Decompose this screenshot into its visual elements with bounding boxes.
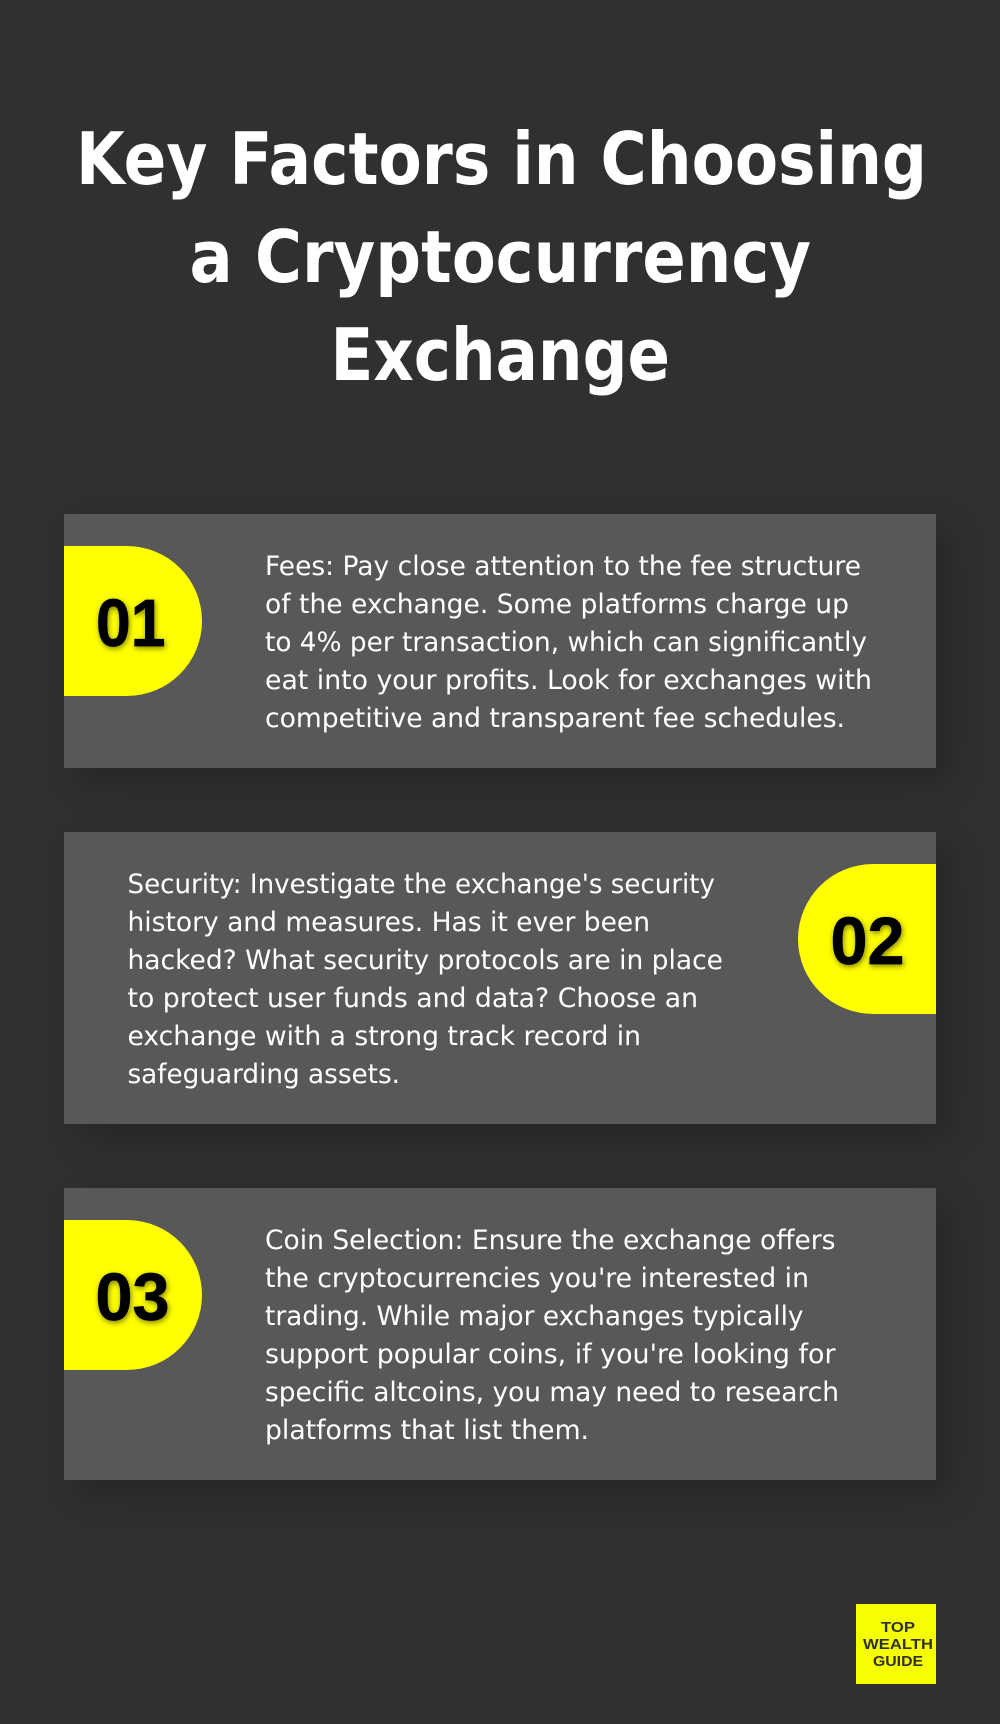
text: coin selection: Coin Selection: Ensure the exchange offers bbox=[265, 1225, 836, 1256]
panel: fees bbox=[64, 514, 936, 768]
title bbox=[76, 117, 927, 397]
text: coin selection: platforms that list them. bbox=[265, 1415, 589, 1446]
text: coin selection: support popular coins, if you're looking for bbox=[265, 1339, 836, 1370]
text: fees bbox=[265, 551, 872, 734]
text: security: exchange with a strong track record in bbox=[128, 1021, 641, 1052]
number badge 01 bbox=[64, 546, 202, 696]
text: security: to protect user funds and data? Choose an bbox=[128, 983, 698, 1014]
title: a Cryptocurrency bbox=[190, 215, 811, 299]
text: security: history and measures. Has it ever been bbox=[128, 907, 650, 938]
text: coin selection: the cryptocurrencies you're interested in bbox=[265, 1263, 809, 1294]
text: security: hacked? What security protocols are in place bbox=[128, 945, 723, 976]
number badge 02 bbox=[798, 864, 936, 1014]
text: security: Security: Investigate the exchange's security bbox=[128, 869, 715, 900]
panel: coin selection bbox=[64, 1188, 936, 1480]
text: fees: competitive and transparent fee schedules. bbox=[265, 703, 845, 734]
text: fees: Fees: Pay close attention to the fee structure bbox=[265, 551, 861, 582]
logo bbox=[856, 1604, 936, 1684]
text: fees: eat into your profits. Look for exchanges with bbox=[265, 665, 872, 696]
text: coin selection bbox=[265, 1225, 839, 1446]
logo: WEALTH bbox=[863, 1637, 933, 1653]
logo: GUIDE bbox=[873, 1654, 923, 1670]
text: coin selection: trading. While major exchanges typically bbox=[265, 1301, 804, 1332]
panel: security bbox=[64, 832, 936, 1124]
logo: TOP bbox=[881, 1620, 915, 1636]
number badge 02: 02 bbox=[830, 904, 904, 979]
text: fees: to 4% per transaction, which can significantly bbox=[265, 627, 867, 658]
number badge 01: 01 bbox=[96, 586, 166, 661]
text: security: safeguarding assets. bbox=[128, 1059, 400, 1090]
number badge 03 bbox=[64, 1220, 202, 1370]
text: coin selection: specific altcoins, you may need to research bbox=[265, 1377, 839, 1408]
number badge 03: 03 bbox=[96, 1260, 170, 1335]
text: fees: of the exchange. Some platforms charge up bbox=[265, 589, 849, 620]
text: security bbox=[128, 869, 723, 1090]
title: Exchange bbox=[330, 313, 670, 397]
